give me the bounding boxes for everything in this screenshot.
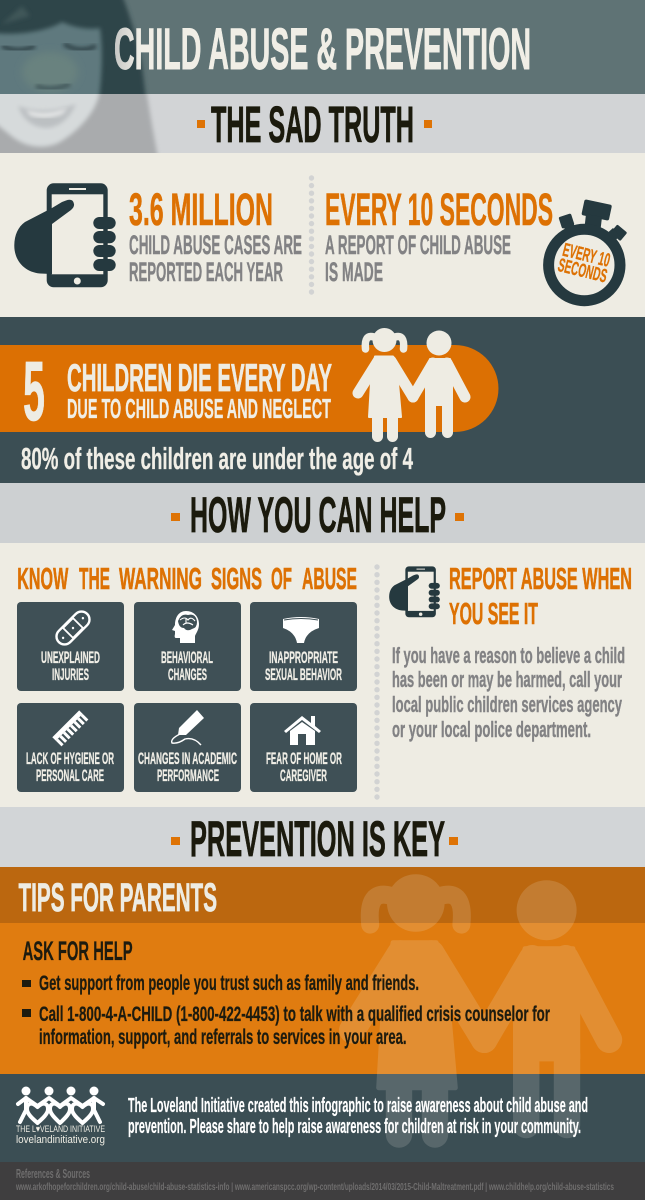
card: lack of hygiene (17, 703, 124, 792)
card: changes in academic performance (134, 703, 241, 792)
panel: help (0, 543, 645, 807)
banner text (67, 357, 332, 424)
card: behavioral changes (134, 602, 241, 691)
heading: tips for parents: TIPS FOR PARENTS (18, 876, 217, 920)
heading: warning signs (17, 561, 357, 596)
icon: comb (52, 710, 88, 746)
icon: pencil (172, 710, 204, 745)
heading: warning signs: ABUSE (302, 561, 357, 596)
icon: hand holding phone (14, 183, 116, 287)
watermark: two children (352, 874, 609, 1135)
stat: 3.6 million: REPORTED EACH YEAR (129, 257, 283, 287)
card: unexplained injuries: UNEXPLAINED (41, 648, 100, 667)
heading: report abuse (449, 561, 632, 631)
text block: references and sources: References & Sources (16, 1166, 90, 1181)
panel: children die every day (0, 317, 645, 483)
icon: house (284, 716, 321, 745)
banner text: DUE TO CHILD ABUSE AND NEGLECT (67, 393, 331, 424)
card: changes in academic performance: CHANGES IN ACADEMIC (138, 749, 237, 768)
stat: every 10 seconds: IS MADE (325, 257, 383, 287)
logo: the Loveland Initiative: lovelandinitiative.org (16, 1134, 105, 1146)
heading: the sad truth: THE SAD TRUTH (211, 96, 414, 153)
heading: warning signs: SIGNS (211, 561, 262, 596)
card: unexplained injuries: INJURIES (52, 665, 89, 684)
heading: warning signs: KNOW (17, 561, 69, 596)
band: tips for parents (0, 867, 645, 923)
card: lack of hygiene: LACK OF HYGIENE OR (26, 749, 114, 768)
card: inappropriate sexual behavior (250, 602, 357, 691)
stat: every 10 seconds (325, 184, 553, 287)
stat: 3.6 million (129, 184, 302, 287)
section band: how you can help (0, 483, 645, 543)
icon: small hand holding phone (389, 566, 440, 617)
logo: the Loveland Initiative (16, 1086, 105, 1146)
heading: ask for help: ASK FOR HELP (23, 936, 133, 966)
text block: about the infographic (128, 1095, 588, 1138)
list: tips: information, support, and referrals to services in your area. (39, 1026, 406, 1049)
stat: 3.6 million: 3.6 MILLION (129, 184, 273, 235)
panel: about the initiative (0, 1074, 645, 1162)
panel: children die every day: 5 (23, 344, 45, 438)
text block: report abuse advice (392, 643, 625, 742)
card: behavioral changes: BEHAVIORAL (161, 648, 213, 667)
panel: statistics (0, 153, 645, 317)
section band: the sad truth (0, 94, 645, 153)
card: unexplained injuries (17, 602, 124, 691)
photo: crying child (0, 0, 158, 158)
icon: head with brain (172, 611, 199, 643)
heading: warning signs: THE (79, 561, 110, 596)
list: tips: Get support from people you trust such as family and friends. (39, 972, 419, 995)
panel: references (0, 1162, 645, 1200)
logo: the Loveland Initiative: THE L♥VELAND INITIATIVE (16, 1124, 105, 1135)
card: inappropriate sexual behavior: INAPPROPRIATE (269, 648, 338, 667)
section band: prevention is key (0, 807, 645, 867)
orange banner (0, 345, 498, 432)
list: tips (22, 972, 550, 1049)
icon: underwear (283, 617, 319, 643)
card: lack of hygiene: PERSONAL CARE (36, 766, 104, 785)
text block: references and sources (15, 1166, 614, 1193)
heading: warning signs: OF (271, 561, 292, 596)
icon: two children holding hands (358, 328, 465, 436)
icon: stopwatch (549, 199, 627, 301)
card: fear of home: FEAR OF HOME OR (266, 749, 342, 768)
panel: tips body (0, 923, 645, 1074)
panel: statistics: CHILD ABUSE CASES ARE (129, 230, 302, 260)
card: behavioral changes: CHANGES (168, 665, 207, 684)
banner text: CHILDREN DIE EVERY DAY (67, 357, 332, 400)
heading: warning signs: WARNING (119, 561, 202, 596)
header band (0, 0, 645, 94)
heading: the sad truth (197, 96, 432, 153)
card: changes in academic performance: PERFORMANCE (157, 766, 219, 785)
heading: report abuse: YOU SEE IT (449, 596, 538, 631)
card: fear of home: CAREGIVER (280, 766, 327, 785)
card: fear of home (250, 703, 357, 792)
card: inappropriate sexual behavior: SEXUAL BEHAVIOR (265, 665, 342, 684)
icon: bandage (53, 608, 93, 648)
